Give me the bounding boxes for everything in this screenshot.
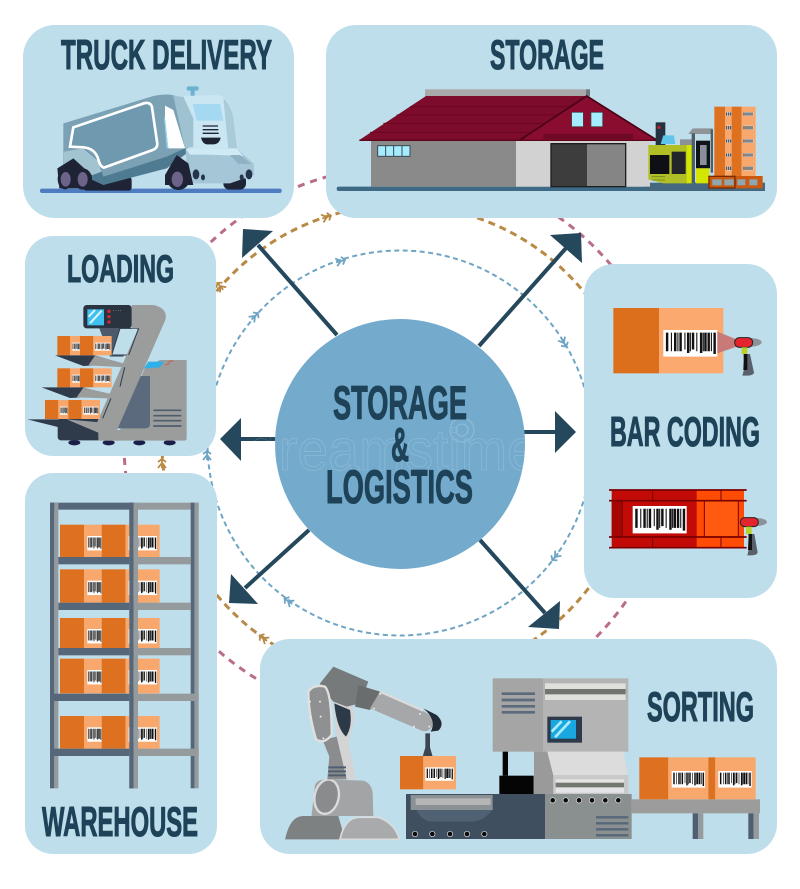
hub title: STORAGE [333,376,467,429]
arrow: to loading [220,418,276,461]
icon: red container being scanned [609,490,767,555]
heading: warehouse: WAREHOUSE [42,798,198,845]
arrow: to sorting [480,540,560,629]
icon: robot arm [285,667,442,839]
hub title [326,376,473,513]
panel: truck delivery [23,25,294,218]
hub title: & [391,418,409,471]
icon: sorting machine and conveyor [400,678,760,839]
arrow: to bar coding [524,411,576,453]
heading: loading: LOADING [67,248,174,291]
panel: storage [326,25,777,218]
icon: warehouse building with forklift and pallet [337,89,765,191]
heading: truck delivery: TRUCK DELIVERY [61,31,272,78]
icon: cardboard box being scanned [613,308,762,376]
hub title: LOGISTICS [326,460,473,513]
panel: loading [25,236,216,456]
icon: shelves with boxes [50,503,199,788]
heading: storage: STORAGE [490,31,604,78]
central hub: storage and logistics [248,319,538,569]
arrow: to warehouse [229,530,309,604]
arrow: to storage [479,233,582,346]
dashed ring: blue [203,250,592,636]
icon: robotic loader with boxes [27,305,187,445]
icon: self-driving truck [40,86,282,193]
panel: warehouse [25,473,217,854]
panel: sorting [260,639,777,854]
panel: bar coding [584,264,777,598]
watermark: dreamstime [248,418,538,483]
arrow: to truck delivery [242,229,337,335]
dashed ring: brown [158,205,638,681]
dashed ring: pink [124,167,676,719]
